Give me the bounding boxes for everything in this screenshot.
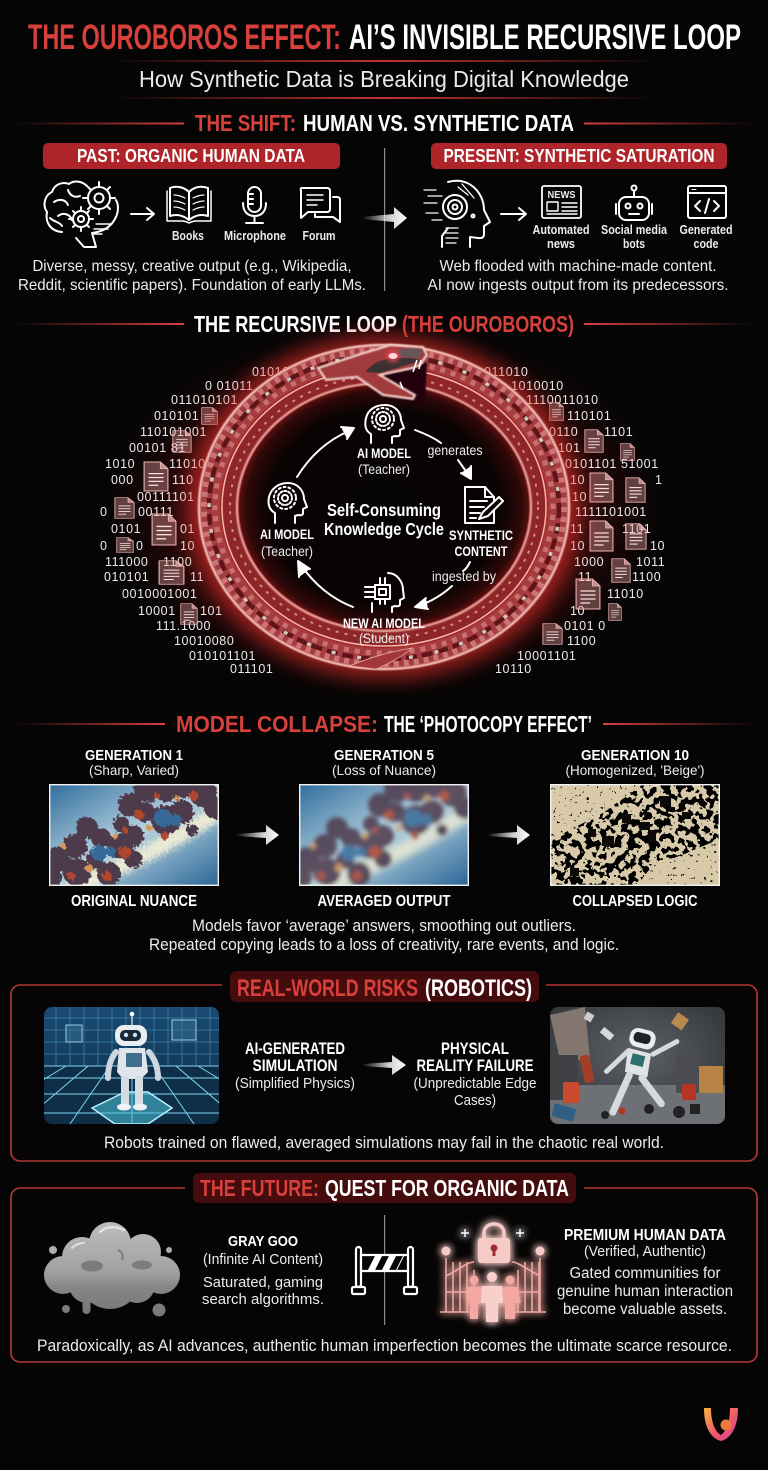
binary data field: 101 — [200, 604, 223, 618]
label: physical reality failure: (Unpredictable Edge — [414, 1075, 536, 1092]
heading: generation 10: GENERATION 10 — [581, 748, 689, 764]
label: AI model left — [260, 526, 314, 559]
title: THE OUROBOROS EFFECT: — [28, 18, 341, 57]
label: gray goo — [202, 1233, 324, 1308]
label: AI model top — [357, 445, 411, 477]
label: premium human data — [557, 1227, 733, 1318]
arrow: past to present — [362, 207, 407, 229]
output labels: bots — [623, 236, 645, 251]
label: cycle centre: Self-Consuming — [327, 500, 441, 520]
image: robot in simulation — [44, 1007, 219, 1124]
label: synthetic content: CONTENT — [454, 543, 508, 559]
past description — [18, 258, 366, 294]
binary data field: 0101101 51001 — [565, 457, 659, 471]
binary data field: 011101 — [230, 662, 273, 676]
label: cycle centre: Knowledge Cycle — [324, 519, 444, 539]
binary data field: 0 01011 — [205, 379, 253, 393]
label: generates: generates — [428, 443, 483, 458]
binary data field: 10001101 — [517, 649, 576, 663]
binary data field: 0 — [136, 539, 144, 553]
binary data field: 011010101 — [171, 393, 238, 407]
icon: books — [167, 187, 211, 223]
binary data field: 110101 — [567, 409, 611, 423]
arrow: generation 1 to 5 — [236, 825, 279, 845]
label: gray goo: Saturated, gaming — [203, 1274, 323, 1291]
model collapse description: Models favor ‘average’ answers, smoothing out outliers. — [192, 917, 576, 935]
heading: real-world risks — [222, 971, 546, 1002]
binary data field: 010101101 — [189, 649, 256, 663]
label: premium human data: become valuable assets. — [563, 1301, 727, 1318]
floating documents — [115, 403, 646, 644]
snake head — [318, 345, 427, 403]
binary data field: 10001 — [138, 604, 176, 618]
binary data field: 01010 — [252, 365, 290, 379]
output labels: code — [694, 236, 718, 251]
source labels: Microphone — [224, 228, 286, 243]
binary data field: 00111 — [138, 505, 174, 519]
binary data field: 10010080 — [174, 634, 234, 648]
icon: news: NEWS — [548, 190, 576, 201]
heading: the future: THE FUTURE: — [200, 1175, 319, 1201]
logo mark — [704, 1408, 738, 1441]
binary data field: 11010 — [607, 587, 644, 601]
arrow: brain to sources — [131, 208, 154, 220]
past description: Diverse, messy, creative output (e.g., Wikipedia, — [32, 258, 352, 275]
heading: generation 10 — [566, 748, 704, 778]
label: premium human data: (Verified, Authentic) — [584, 1243, 706, 1260]
heading: generation 5 — [332, 748, 436, 778]
icon: synthetic content — [465, 487, 503, 523]
binary data field: 010101 — [104, 570, 149, 584]
source labels: Books — [172, 228, 204, 243]
binary data field: 110 — [172, 473, 194, 487]
title — [28, 18, 741, 57]
panel: generation 10 — [550, 748, 720, 910]
binary data field: 00111101 — [137, 490, 195, 504]
label: premium human data: PREMIUM HUMAN DATA — [564, 1227, 726, 1244]
icon: gated community with lock — [440, 1224, 546, 1322]
binary data field: 10 — [570, 473, 585, 487]
heading: generation 1: GENERATION 1 — [85, 748, 183, 764]
binary data field: 1 — [655, 473, 663, 487]
binary data field: 0110 — [549, 425, 578, 439]
label: physical reality failure — [414, 1040, 536, 1109]
icon: social media bot — [616, 186, 652, 220]
binary data field: 0 — [100, 539, 108, 553]
past heading pill: PAST: ORGANIC HUMAN DATA — [77, 146, 305, 166]
icon: barrier — [352, 1247, 417, 1294]
binary data field: 11 — [570, 522, 584, 536]
present heading pill: PRESENT: SYNTHETIC SATURATION — [444, 146, 714, 166]
icon: AI head — [424, 181, 490, 247]
label: ingested by: ingested by — [432, 569, 496, 584]
section heading: the shift: THE SHIFT: — [195, 110, 296, 136]
cycle arrows — [297, 427, 471, 609]
label: synthetic content — [449, 527, 513, 559]
binary data field — [100, 365, 665, 676]
label: premium human data: genuine human interaction — [557, 1283, 733, 1300]
section heading: model collapse: MODEL COLLAPSE: — [176, 711, 378, 737]
binary data field: 1111101001 — [575, 505, 647, 519]
arrow: simulation to reality — [362, 1055, 406, 1075]
binary data field: 1110011010 — [526, 393, 599, 407]
binary data field: 111000 — [105, 555, 148, 569]
binary data field: 1000 — [574, 555, 604, 569]
panel: generation 1 — [44, 748, 227, 910]
output labels — [532, 222, 733, 251]
heading: real-world risks: (ROBOTICS) — [425, 975, 532, 1002]
present heading pill — [431, 143, 727, 169]
output labels: Generated — [680, 222, 733, 237]
binary data field: 10 — [570, 539, 585, 553]
heading: generation 5: GENERATION 5 — [334, 748, 434, 764]
arrow: generation 5 to 10 — [487, 825, 530, 845]
heading: generation 1: (Sharp, Varied) — [89, 762, 179, 778]
binary data field: 010101 — [154, 409, 199, 423]
binary data field: 111.1000 — [156, 619, 211, 633]
source labels — [172, 228, 336, 243]
model collapse description — [149, 917, 619, 954]
label: cycle centre — [324, 500, 444, 539]
heading: real-world risks: REAL-WORLD RISKS — [237, 975, 418, 1002]
image: blurred fractal — [299, 784, 469, 886]
binary data field: 0101 — [111, 522, 141, 536]
binary data field: 11 — [190, 570, 204, 584]
present description: AI now ingests output from its predecessors. — [428, 277, 728, 294]
binary data field: 0 — [100, 505, 108, 519]
panel: the future — [11, 1173, 757, 1362]
image: collapsed noise — [550, 784, 720, 886]
section heading: the recursive loop: (THE OUROBOROS) — [402, 311, 574, 337]
icon: microphone — [243, 187, 266, 223]
section heading: the shift: HUMAN VS. SYNTHETIC DATA — [303, 110, 574, 136]
label: AI model top: AI MODEL — [357, 445, 411, 461]
icon: new AI model — [365, 573, 404, 612]
image: robot failing in reality — [550, 1007, 725, 1124]
heading: generation 5: (Loss of Nuance) — [332, 762, 436, 778]
panel: generation 5 — [294, 748, 477, 910]
section heading: the recursive loop — [14, 311, 754, 337]
section heading: model collapse: THE ‘PHOTOCOPY EFFECT’ — [384, 711, 592, 737]
binary data field: 0010001001 — [122, 587, 198, 601]
icon: news — [542, 186, 581, 218]
label: AI-generated simulation: AI-GENERATED — [245, 1040, 345, 1058]
label: gray goo: GRAY GOO — [228, 1233, 298, 1250]
image: sharp fractal — [49, 784, 219, 886]
binary data field: 00101 81 — [129, 441, 186, 455]
binary data field: 000 — [111, 473, 134, 487]
robot figure: simulation — [108, 1012, 158, 1110]
binary data field: 10110 — [495, 662, 532, 676]
label: physical reality failure: Cases) — [454, 1092, 496, 1109]
label: AI-generated simulation: SIMULATION — [252, 1057, 338, 1075]
caption: averaged output: AVERAGED OUTPUT — [318, 893, 451, 910]
label: AI-generated simulation: (Simplified Physics) — [235, 1075, 355, 1092]
section heading: the recursive loop: THE RECURSIVE LOOP — [194, 311, 397, 337]
label: AI model left: (Teacher) — [261, 543, 313, 559]
binary data field: 1010010 — [511, 379, 564, 393]
output labels: news — [547, 236, 575, 251]
label: AI model left: AI MODEL — [260, 526, 314, 542]
label: physical reality failure: REALITY FAILURE — [416, 1057, 534, 1075]
label: AI model top: (Teacher) — [358, 461, 410, 477]
binary data field: 10 — [180, 539, 195, 553]
icon: AI model left — [269, 483, 307, 523]
future description: Paradoxically, as AI advances, authentic human imperfection becomes the ultimate scarce resource. — [37, 1337, 732, 1355]
section heading: the shift — [14, 110, 754, 136]
icon: brain with gears — [45, 182, 118, 247]
binary data field: 110101001 — [140, 425, 207, 439]
present description: Web flooded with machine-made content. — [440, 258, 716, 275]
binary data field: 1101 — [604, 425, 633, 439]
heading: the future — [185, 1173, 584, 1203]
binary data field: 0101 0 — [564, 619, 606, 633]
heading: the future: QUEST FOR ORGANIC DATA — [325, 1175, 569, 1201]
caption: original nuance: ORIGINAL NUANCE — [71, 893, 197, 910]
binary data field: 1101 — [622, 522, 651, 536]
binary data field: 1010 — [105, 457, 135, 471]
present description — [428, 258, 728, 294]
label: gray goo: search algorithms. — [202, 1291, 324, 1308]
heading: generation 1 — [85, 748, 183, 778]
label: physical reality failure: PHYSICAL — [441, 1040, 509, 1058]
arrow: AI head to outputs — [501, 208, 526, 220]
label: new AI model: NEW AI MODEL — [343, 615, 425, 631]
binary data field: 1100 — [632, 570, 661, 584]
source labels: Forum — [302, 228, 336, 243]
label: new AI model — [343, 615, 425, 646]
section heading: model collapse — [14, 711, 754, 737]
icon: AI model top — [365, 405, 404, 443]
binary data field: 10 — [572, 490, 587, 504]
label: synthetic content: SYNTHETIC — [449, 527, 513, 543]
binary data field: 101 — [558, 441, 581, 455]
model collapse description: Repeated copying leads to a loss of creativity, rare events, and logic. — [149, 936, 619, 954]
output labels: Automated — [532, 222, 590, 237]
risks description: Robots trained on flawed, averaged simulations may fail in the chaotic real world. — [104, 1134, 664, 1152]
output labels: Social media — [601, 222, 668, 237]
binary data field: 10 — [650, 539, 665, 553]
past heading pill — [43, 143, 340, 169]
binary data field: 1100 — [567, 634, 596, 648]
icon: gray goo cloud — [44, 1222, 180, 1316]
label: new AI model: (Student) — [359, 630, 409, 646]
label: AI-generated simulation — [235, 1040, 355, 1092]
past description: Reddit, scientific papers). Foundation of early LLMs. — [18, 277, 366, 294]
label: premium human data: Gated communities for — [570, 1265, 720, 1282]
binary data field: 011010 — [484, 365, 528, 379]
panel: real-world risks — [0, 971, 757, 1161]
subtitle: How Synthetic Data is Breaking Digital Knowledge — [139, 66, 629, 92]
icon: forum bubbles — [301, 188, 340, 222]
heading: generation 10: (Homogenized, 'Beige') — [566, 762, 704, 778]
panel: present synthetic saturation — [424, 143, 733, 294]
icon: generated code — [688, 186, 726, 218]
snake body ring — [199, 345, 569, 669]
binary data field: 10 — [570, 604, 585, 618]
binary data field: 11 — [578, 570, 592, 584]
binary data field: 1011 — [636, 555, 665, 569]
panel: past organic human data — [18, 143, 366, 294]
robot figure: falling — [604, 1028, 680, 1116]
binary data field: 11010 — [169, 457, 206, 471]
label: gray goo: (Infinite AI Content) — [203, 1251, 323, 1268]
binary data field: 01 — [180, 522, 195, 536]
diagram: ouroboros loop — [100, 325, 665, 695]
binary data field: 1100 — [163, 555, 192, 569]
caption: collapsed logic: COLLAPSED LOGIC — [572, 893, 698, 910]
